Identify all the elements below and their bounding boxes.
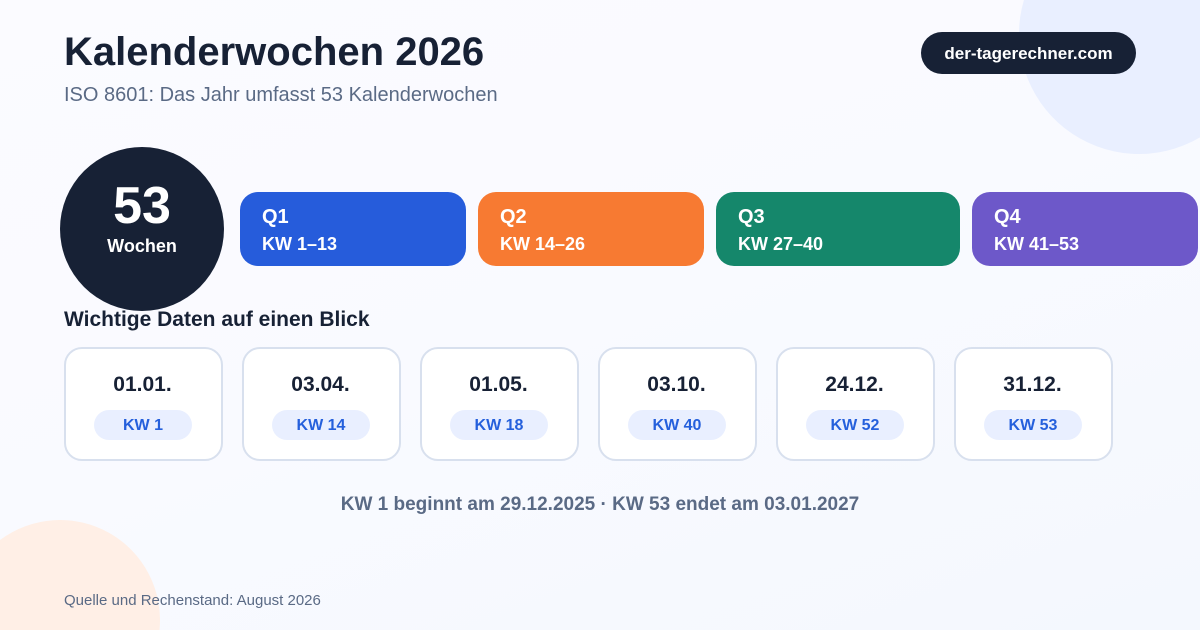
date card: 01.01.: 01.01. (113, 373, 172, 396)
decorative circle: bottom left (0, 520, 160, 630)
panel: Q1: KW 1–13 (262, 234, 337, 254)
date card: 24.12.: KW 52 (831, 417, 879, 434)
date card: 01.01.: KW 1 (123, 417, 163, 434)
section heading: Wichtige Daten auf einen Blick (64, 308, 370, 331)
panel: Q3: KW 27–40 (738, 234, 823, 254)
website badge (921, 32, 1136, 74)
date card: 03.10.: 03.10. (647, 373, 706, 396)
panel: Q2: KW 14–26 (500, 234, 585, 254)
subtitle: ISO 8601: Das Jahr umfasst 53 Kalenderwochen (64, 84, 498, 106)
note: week boundaries: KW 1 beginnt am 29.12.2025 · KW 53 endet am 03.01.2027 (341, 494, 859, 515)
circle: total weeks (60, 147, 224, 311)
panel: Q1 (240, 192, 466, 266)
date card: 24.12. (776, 347, 935, 461)
number 53: 53 (113, 177, 171, 235)
panel: Q3: Q3 (738, 206, 765, 228)
date card: 01.05. (420, 347, 579, 461)
date card: 03.04.: 03.04. (291, 373, 350, 396)
website badge: der-tagerechner.com (944, 44, 1113, 63)
panel: Q4: KW 41–53 (994, 234, 1079, 254)
date card: 03.04.: KW 14 (297, 417, 345, 434)
date card: 03.10.: KW 40 (653, 417, 701, 434)
date card: 31.12.: KW 53 (1009, 417, 1057, 434)
label Wochen: Wochen (107, 236, 177, 256)
source note: Quelle und Rechenstand: August 2026 (64, 592, 321, 609)
panel: Q2 (478, 192, 704, 266)
date card: 01.05.: 01.05. (469, 373, 528, 396)
title: Kalenderwochen 2026 (64, 30, 484, 74)
date card: 01.01. (64, 347, 223, 461)
date card: 03.10. (598, 347, 757, 461)
date card: 24.12.: 24.12. (825, 373, 884, 396)
panel: Q1: Q1 (262, 206, 289, 228)
panel: Q4: Q4 (994, 206, 1021, 228)
panel: Q4 (972, 192, 1198, 266)
panel: Q2: Q2 (500, 206, 527, 228)
date card: 01.05.: KW 18 (475, 417, 523, 434)
date card: 31.12. (954, 347, 1113, 461)
date card: 31.12.: 31.12. (1003, 373, 1062, 396)
decorative circle: top right (1019, 0, 1200, 154)
date card: 03.04. (242, 347, 401, 461)
panel: Q3 (716, 192, 960, 266)
